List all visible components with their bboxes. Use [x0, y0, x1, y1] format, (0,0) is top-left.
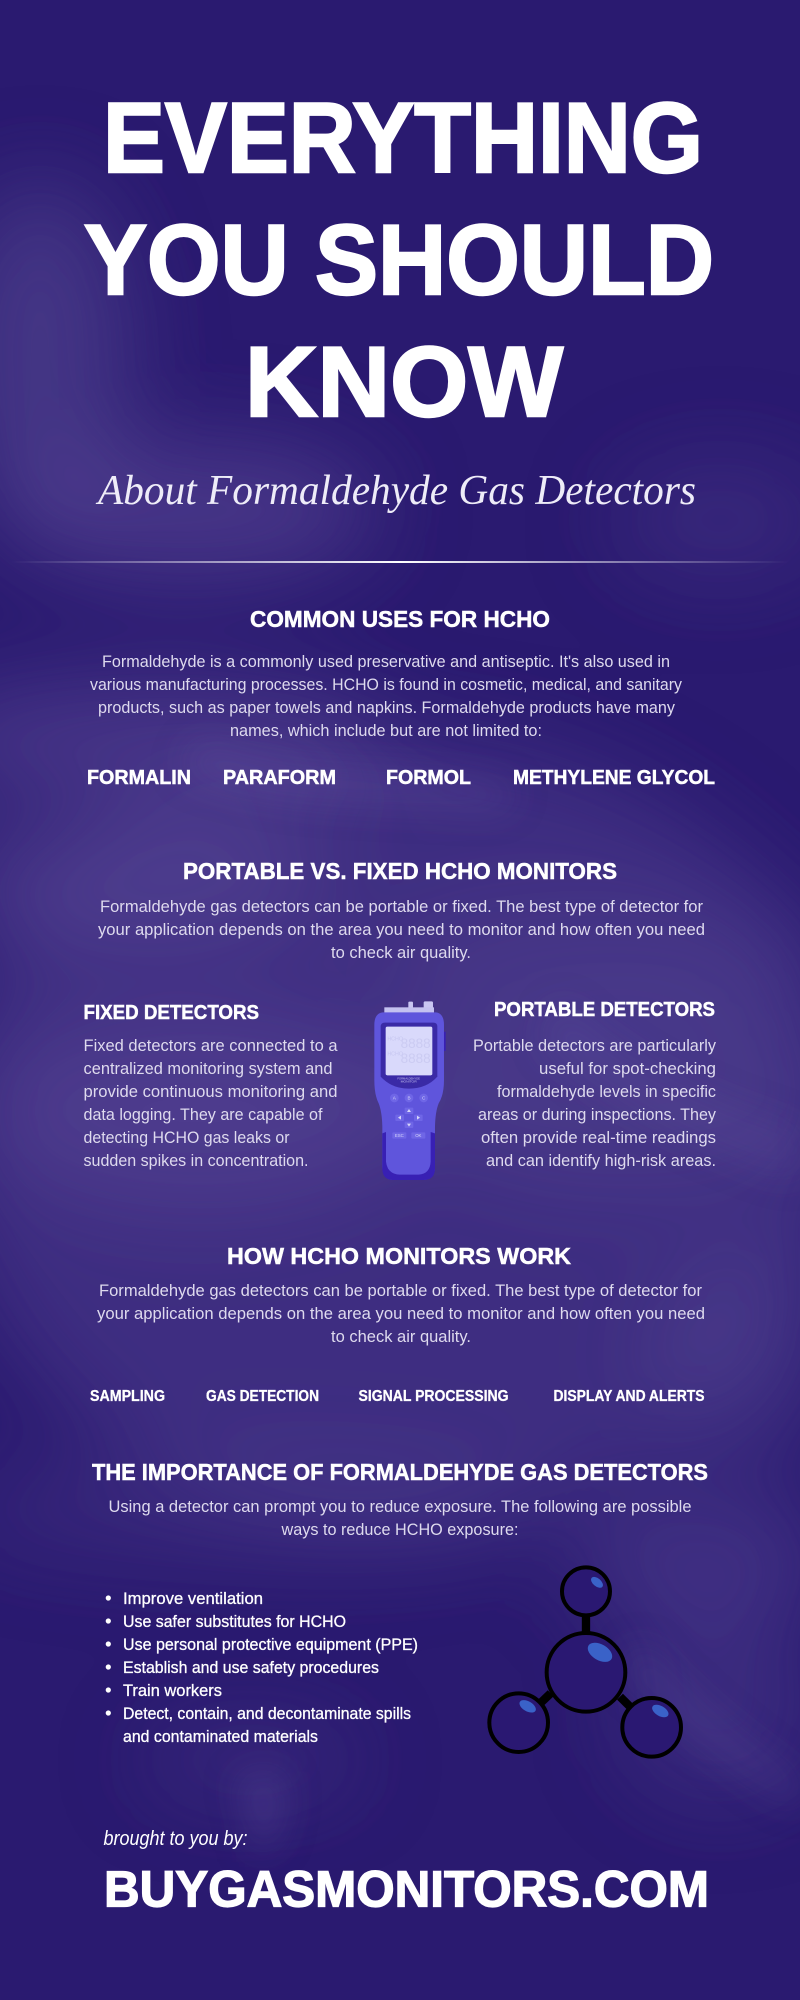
section: common uses for HCHO [87, 606, 715, 789]
portable detectors column: often provide real-time readings [481, 1128, 716, 1147]
title: EVERYTHING [103, 83, 703, 194]
body text: your application depends on the area you need to monitor and how often you need [98, 920, 705, 939]
body text [97, 1281, 705, 1346]
icon: handheld gas detector: ESC [395, 1133, 404, 1138]
website name: BUYGASMONITORS.COM [104, 1860, 709, 1918]
fixed detectors column: FIXED DETECTORS [84, 1001, 259, 1024]
body text: names, which include but are not limited to: [230, 721, 542, 740]
body text: products, such as paper towels and napkins. Formaldehyde products have many [98, 698, 675, 717]
bullet list: Train workers [123, 1681, 222, 1700]
icon: molecule [489, 1567, 681, 1757]
body text: Formaldehyde gas detectors can be portable or fixed. The best type of detector for [100, 897, 703, 916]
heading: PORTABLE VS. FIXED HCHO MONITORS [183, 858, 617, 884]
body text [108, 1497, 692, 1539]
title: YOU SHOULD [84, 205, 714, 316]
bullet list [106, 1589, 418, 1746]
fixed detectors column: detecting HCHO gas leaks or [84, 1128, 290, 1147]
body text: your application depends on the area you need to monitor and how often you need [97, 1304, 705, 1323]
body text: ways to reduce HCHO exposure: [281, 1520, 518, 1539]
bullet list: Detect, contain, and decontaminate spills [123, 1704, 411, 1723]
credit line: brought to you by: [104, 1828, 248, 1850]
portable detectors column: Portable detectors are particularly [473, 1036, 716, 1055]
bullet list: and contaminated materials [123, 1727, 318, 1746]
icon: handheld gas detector: 8888 [401, 1050, 431, 1066]
names list: PARAFORM [223, 767, 336, 789]
icon: handheld gas detector: 8888 [401, 1035, 431, 1051]
heading: COMMON USES FOR HCHO [250, 606, 550, 632]
subtitle: About Formaldehyde Gas Detectors [95, 468, 696, 514]
fixed detectors column: provide continuous monitoring and [84, 1082, 338, 1101]
bullet list: Use personal protective equipment (PPE) [123, 1635, 418, 1654]
steps list: DISPLAY AND ALERTS [554, 1388, 704, 1405]
section: how HCHO monitors work [90, 1243, 705, 1405]
fixed detectors column: sudden spikes in concentration. [84, 1151, 308, 1170]
names list [87, 767, 715, 789]
body text [98, 897, 705, 962]
heading: THE IMPORTANCE OF FORMALDEHYDE GAS DETECTORS [92, 1459, 708, 1485]
icon: handheld gas detector: C [422, 1096, 426, 1101]
names list: FORMOL [386, 767, 471, 789]
title [84, 83, 714, 438]
steps list: SAMPLING [90, 1388, 165, 1405]
portable detectors column [473, 998, 716, 1170]
body text: Using a detector can prompt you to reduce exposure. The following are possible [108, 1497, 692, 1516]
icon: handheld gas detector: A [393, 1096, 397, 1101]
body text [90, 652, 682, 740]
icon: handheld gas detector: FORMALDEHYDE [397, 1076, 420, 1080]
section: importance of detectors [92, 1459, 708, 1757]
steps list [90, 1388, 704, 1405]
steps list: GAS DETECTION [206, 1388, 319, 1405]
bullet list: Establish and use safety procedures [123, 1658, 379, 1677]
names list: METHYLENE GLYCOL [513, 767, 715, 789]
body text: Formaldehyde is a commonly used preservative and antiseptic. It's also used in [102, 652, 670, 671]
body text: to check air quality. [331, 943, 471, 962]
body text: Formaldehyde gas detectors can be portable or fixed. The best type of detector for [99, 1281, 702, 1300]
fixed detectors column: data logging. They are capable of [84, 1105, 323, 1124]
portable detectors column: PORTABLE DETECTORS [494, 998, 715, 1021]
bullet list: Use safer substitutes for HCHO [123, 1612, 346, 1631]
bullet list: Improve ventilation [123, 1589, 263, 1608]
body text: to check air quality. [331, 1327, 471, 1346]
portable detectors column: formaldehyde levels in specific [497, 1082, 716, 1101]
icon: handheld gas detector: MONITOR [401, 1080, 418, 1084]
fixed detectors column [84, 1001, 338, 1170]
icon: handheld gas detector: B [407, 1096, 411, 1101]
portable detectors column: areas or during inspections. They [478, 1105, 716, 1124]
names list: FORMALIN [87, 767, 191, 789]
icon: handheld gas detector: OK [415, 1133, 422, 1138]
icon: handheld gas detector [374, 1001, 446, 1180]
fixed detectors column: Fixed detectors are connected to a [84, 1036, 338, 1055]
icon: handheld gas detector: HCHO [387, 1037, 403, 1043]
steps list: SIGNAL PROCESSING [358, 1388, 508, 1405]
portable detectors column: and can identify high-risk areas. [486, 1151, 716, 1170]
fixed detectors column: centralized monitoring system and [84, 1059, 332, 1078]
heading: HOW HCHO MONITORS WORK [227, 1243, 571, 1269]
body text: various manufacturing processes. HCHO is found in cosmetic, medical, and sanitary [90, 675, 682, 694]
section: portable vs fixed [84, 858, 716, 1180]
icon: handheld gas detector: HCHO [387, 1052, 403, 1058]
portable detectors column: useful for spot-checking [539, 1059, 716, 1078]
title: KNOW [245, 327, 563, 438]
